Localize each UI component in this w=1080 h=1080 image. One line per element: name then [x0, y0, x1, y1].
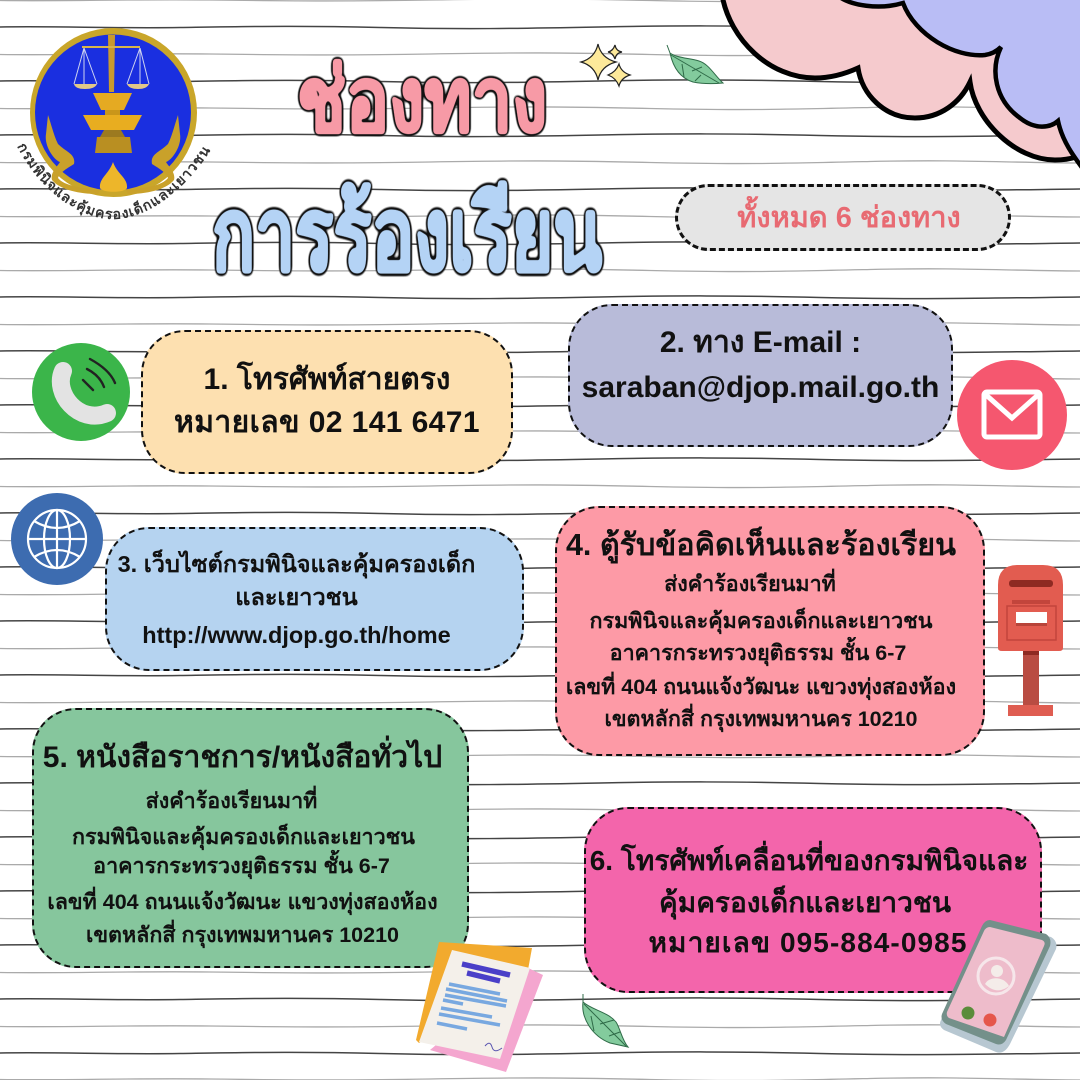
panel: 5 official letter: อาคารกระทรวงยุติธรรม ชั้น 6-7: [93, 854, 390, 878]
panel: 6 mobile phone: คุ้มครองเด็กและเยาวชน: [659, 887, 951, 918]
panel: 5 official letter: 5. หนังสือราชการ/หนังสือทั่วไป: [43, 741, 442, 774]
panel: 6 mobile phone: หมายเลข 095-884-0985: [648, 927, 968, 958]
panel: 5 official letter: เขตหลักสี่ กรุงเทพมหานคร 10210: [86, 923, 399, 947]
panel: 5 official letter: [32, 708, 469, 968]
icon: smartphone: [940, 920, 1056, 1053]
panel: 2 email: 2. ทาง E-mail :: [660, 326, 861, 359]
panel: 3 website: และเยาวชน: [235, 584, 358, 610]
title line 1: ช่องทาง: [297, 50, 547, 150]
icon: red mailbox: [998, 565, 1063, 716]
panel: 4 complaint box: เขตหลักสี่ กรุงเทพมหานคร 10210: [604, 707, 918, 731]
panel: 1 direct phone: [141, 330, 513, 474]
panel: 4 complaint box: กรมพินิจและคุ้มครองเด็กและเยาวชน: [590, 609, 932, 633]
icon: envelope: [957, 360, 1067, 470]
icon: sparkles: [579, 44, 632, 88]
panel: 5 official letter: เลขที่ 404 ถนนแจ้งวัฒนะ แขวงทุ่งสองห้อง: [47, 890, 438, 914]
icon: globe: [11, 493, 103, 585]
panel: 3 website: [105, 527, 524, 671]
icon: documents: [416, 942, 543, 1072]
panel: 3 website: http://www.djop.go.th/home: [142, 622, 451, 648]
panel: 4 complaint box: อาคารกระทรวงยุติธรรม ชั้น 6-7: [610, 641, 906, 665]
panel: 1 direct phone: 1. โทรศัพท์สายตรง: [204, 363, 450, 396]
panel: 4 complaint box: ส่งคำร้องเรียนมาที่: [664, 572, 836, 596]
tiered pedestal: [83, 93, 142, 153]
panel: 3 website: 3. เว็บไซต์กรมพินิจและคุ้มครองเด็ก: [118, 551, 475, 577]
logo: department emblem: [17, 28, 210, 220]
emblem disc: [30, 28, 197, 197]
icon: leaf top: [666, 44, 724, 84]
curved department name: กรมพินิจและคุ้มครองเด็กและเยาวชน: [17, 144, 210, 220]
panel: 2 email: [568, 304, 953, 447]
panel: 5 official letter: กรมพินิจและคุ้มครองเด็กและเยาวชน: [72, 825, 415, 849]
summary pill: [675, 184, 1011, 251]
icon: leaf bottom: [582, 994, 630, 1048]
naga right: [126, 115, 180, 194]
panel: 5 official letter: ส่งคำร้องเรียนมาที่: [146, 789, 317, 813]
panel: 4 complaint box: [555, 506, 985, 756]
icon: phone: [32, 343, 130, 441]
panel: 1 direct phone: หมายเลข 02 141 6471: [174, 406, 480, 439]
summary pill: ทั้งหมด 6 ช่องทาง: [737, 202, 961, 234]
naga left: [46, 115, 100, 194]
panel: 6 mobile phone: 6. โทรศัพท์เคลื่อนที่ของกรมพินิจและ: [590, 845, 1028, 876]
title line 2: การร้องเรียน: [212, 178, 602, 292]
panel: 4 complaint box: เลขที่ 404 ถนนแจ้งวัฒนะ แขวงทุ่งสองห้อง: [566, 675, 956, 699]
flame: [100, 162, 127, 192]
panel: 2 email: saraban@djop.mail.go.th: [582, 371, 939, 404]
panel: 4 complaint box: 4. ตู้รับข้อคิดเห็นและร้องเรียน: [566, 528, 956, 562]
scales of justice: [74, 35, 149, 92]
panel: 6 mobile phone: [584, 807, 1042, 993]
